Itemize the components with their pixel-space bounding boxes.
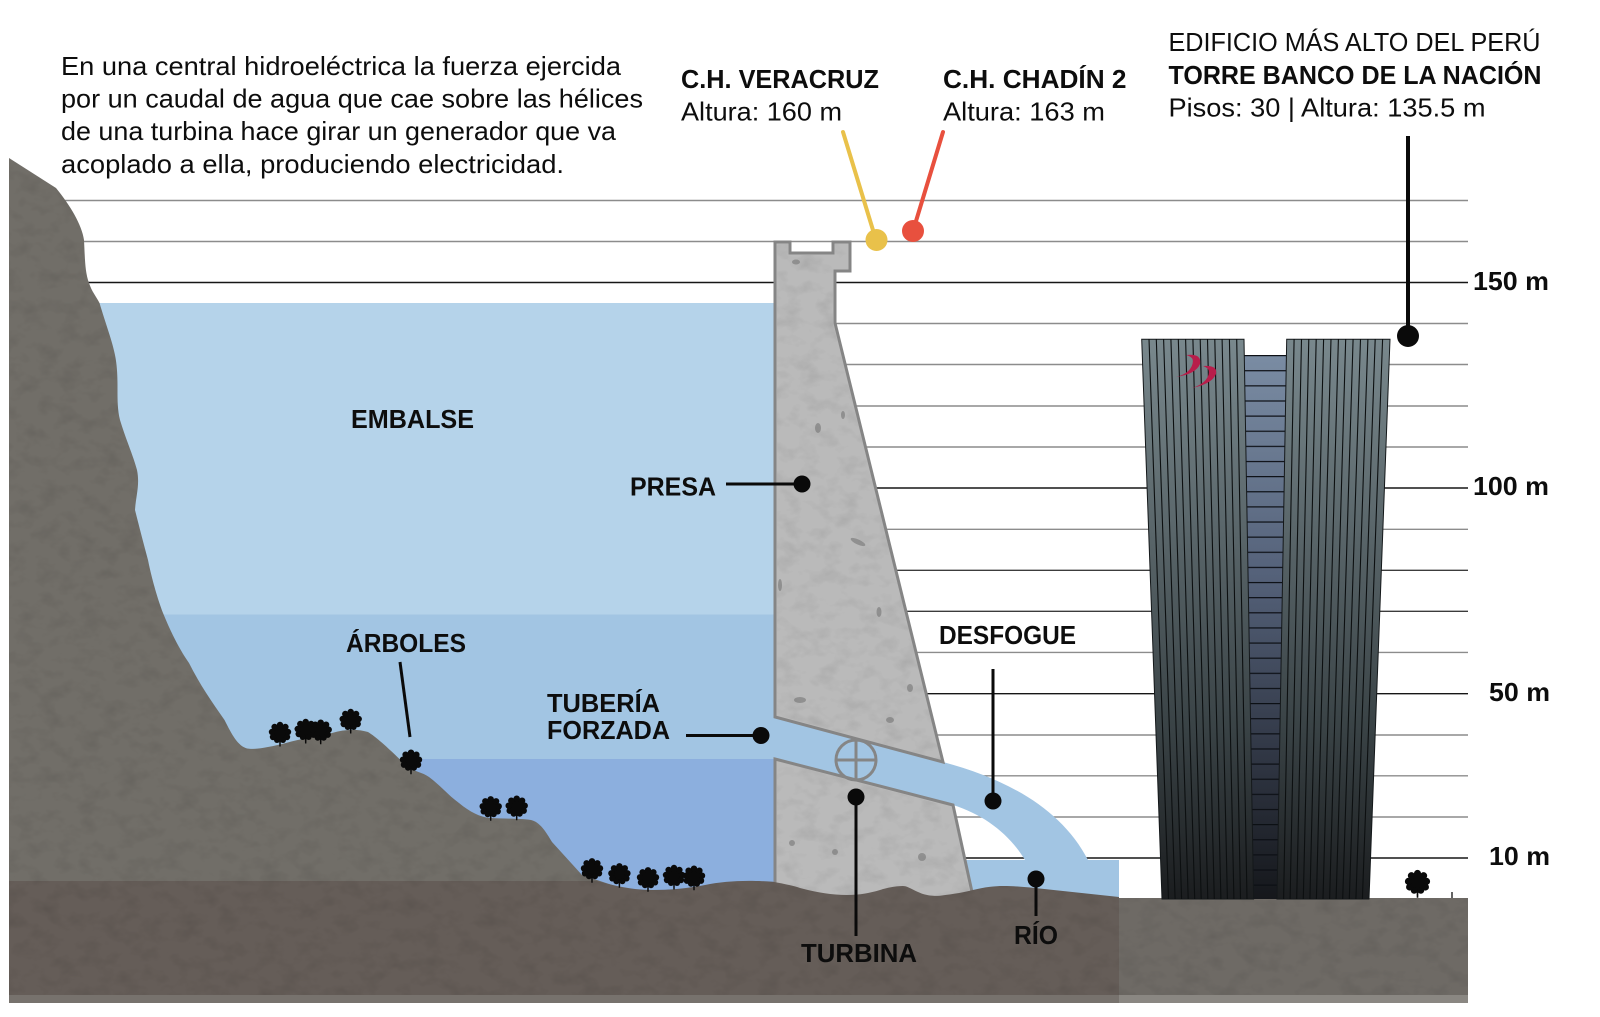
dam [775,242,972,905]
scale label: 100 m: 100 m [1473,471,1549,501]
intro text: por un caudal de agua que cae sobre las hélices [61,84,643,114]
intro text: de una turbina hace girar un generador que va [61,116,617,146]
callout: C.H. Chadín 2: Altura: 163 m [943,96,1105,126]
label: desfogue with leader: DESFOGUE [939,620,1076,650]
callout: tallest building: EDIFICIO MÁS ALTO DEL PERÚ [1168,27,1540,57]
scale label: 50 m: 50 m [1489,677,1550,707]
scale label: 150 m: 150 m [1473,266,1549,296]
callout: tallest building: Pisos: 30 | Altura: 135.5 m [1168,92,1486,122]
height scale grid lines [40,200,1468,858]
right tree [1405,870,1430,898]
label: desfogue with leader [939,620,1076,810]
turbine symbol [836,740,876,780]
tower right wing [1277,339,1390,899]
person scale figure [1451,892,1453,898]
label: presa with leader [630,472,810,502]
tower: Torre Banco de la Nación [1142,339,1390,899]
label: río with leader [1014,870,1058,950]
dam lower section [775,759,972,905]
foreground riverbed ground [9,881,1119,1003]
label: presa with leader: PRESA [630,472,716,502]
reservoir water [80,303,776,899]
intro text: acoplado a ella, produciendo electricidad. [61,149,564,179]
label: tubería forzada with leader [547,688,770,745]
scale label: 10 m: 10 m [1489,841,1550,871]
label: tubería forzada with leader: TUBERÍA [547,688,660,718]
label: turbina with leader [801,788,917,968]
callout: C.H. Veracruz: C.H. VERACRUZ [681,64,879,94]
callout: C.H. Veracruz [681,64,888,251]
label: tubería forzada with leader: FORZADA [547,715,670,745]
dam upper section [775,242,943,762]
callout: tallest building [1168,27,1542,347]
dam concrete texture [777,244,970,905]
label: turbina with leader: TURBINA [801,938,917,968]
label: río with leader: RÍO [1014,920,1058,950]
city ground [1119,898,1468,1003]
tower central core [1244,355,1287,899]
hillside terrain [9,158,612,890]
callout: tallest building: TORRE BANCO DE LA NACIÓN [1168,60,1542,90]
tower logo [1176,355,1216,388]
label: árboles with leader [346,628,466,737]
intro text: En una central hidroeléctrica la fuerza ejercida [61,51,622,81]
label: árboles with leader: ÁRBOLES [346,628,466,658]
trees [269,709,705,892]
callout: C.H. Chadín 2: C.H. CHADÍN 2 [943,64,1126,94]
label: embalse: EMBALSE [351,404,474,434]
callout: C.H. Chadín 2 [902,64,1126,242]
tower left wing [1142,339,1254,899]
callout: C.H. Veracruz: Altura: 160 m [681,96,842,126]
penstock and discharge pipe [770,717,1119,900]
